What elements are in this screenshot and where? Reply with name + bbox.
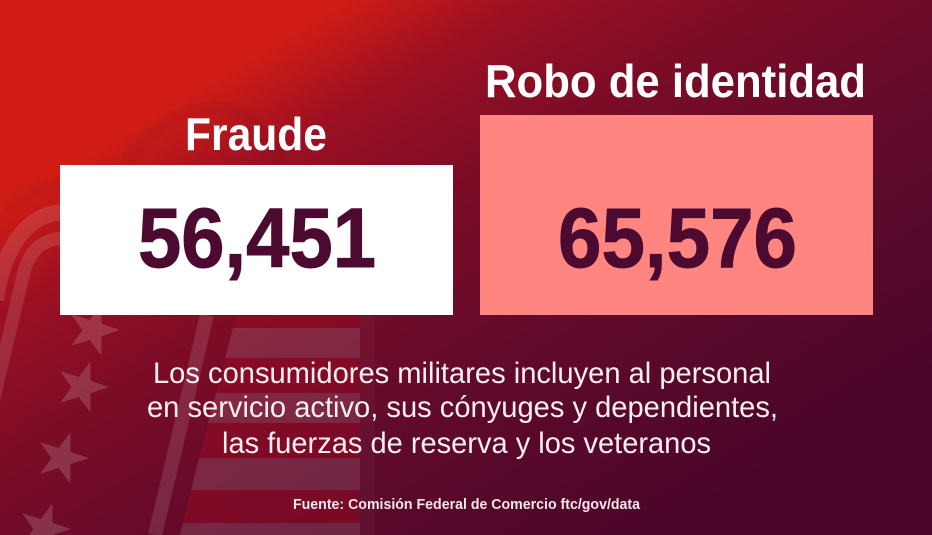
decorative flag artwork <box>0 108 375 535</box>
heading: robo de identidad: Robo de identidad <box>485 55 866 107</box>
text block: description: las fuerzas de reserva y los veteranos <box>222 427 711 460</box>
text block: description: Los consumidores militares incluyen al personal <box>153 357 771 390</box>
icon: flag edge band <box>360 315 375 535</box>
heading: fraude: Fraude <box>185 108 327 160</box>
source note: Fuente: Comisión Federal de Comercio ftc/gov/data <box>293 497 641 513</box>
text block: description: en servicio activo, sus cónyuges y dependientes, <box>147 391 778 424</box>
white number box <box>60 165 453 315</box>
panel: fraude <box>60 108 453 315</box>
icon: flag red stripes <box>183 315 360 523</box>
icon: stars <box>13 296 126 535</box>
pink number box <box>480 115 873 315</box>
panel: robo de identidad <box>480 55 873 315</box>
icon: faint arches <box>5 108 285 210</box>
number: fraude: 56,451 <box>138 191 376 285</box>
icon: shield outline bands <box>0 212 207 535</box>
icon: flag light stripes <box>180 328 360 535</box>
number: robo de identidad: 65,576 <box>558 191 797 285</box>
text block: description <box>147 357 778 460</box>
